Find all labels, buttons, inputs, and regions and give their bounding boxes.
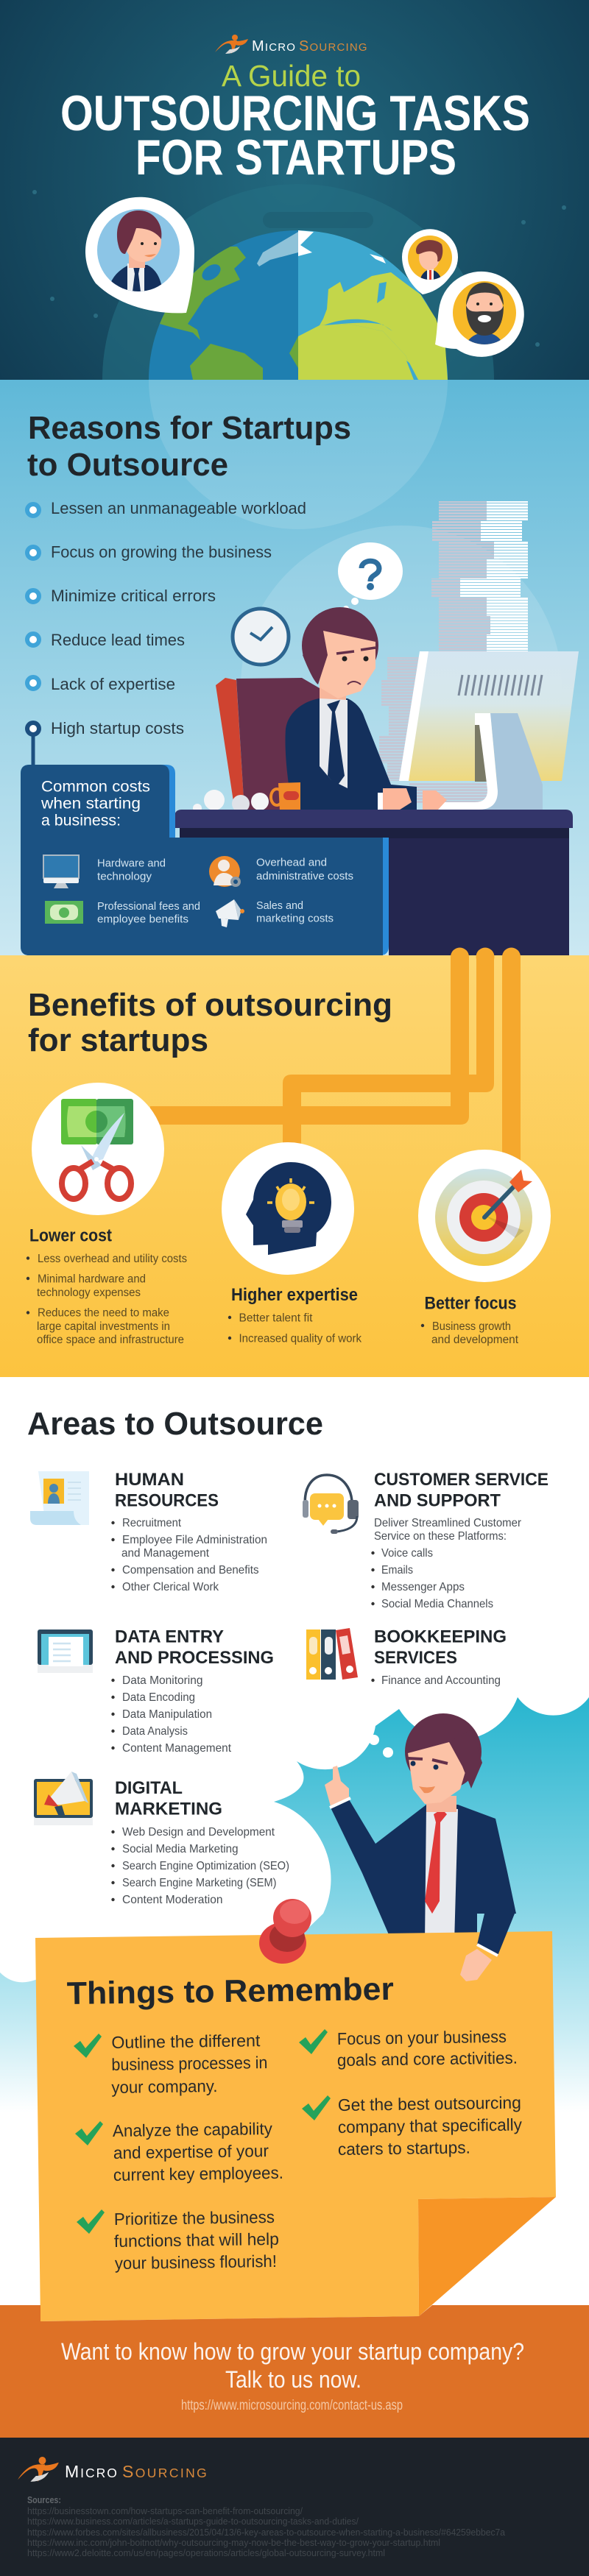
icon: crumpled paper	[193, 790, 269, 813]
panel: things to remember	[35, 1899, 556, 2321]
panel: benefits of outsourcing	[0, 948, 589, 1377]
heading: common costs: a business:	[41, 813, 121, 829]
icon: mug	[271, 782, 300, 811]
text: data entry: DATA ENTRY	[115, 1627, 224, 1647]
list: reasons: Lack of expertise	[51, 675, 175, 693]
illustration: desk	[174, 810, 573, 955]
text: call to action: https://www.microsourcing.com/contact-us.asp	[181, 2398, 403, 2413]
checklist: right column: caters to startups.	[338, 2137, 470, 2159]
text: data entry: Data Encoding	[122, 1691, 195, 1704]
heading: common costs: Common costs	[41, 779, 150, 795]
checklist: right column	[299, 2027, 523, 2159]
checklist: left column: your company.	[111, 2076, 218, 2097]
panel: header	[0, 0, 589, 380]
text: customer service: AND SUPPORT	[374, 1491, 501, 1510]
panel: call to action	[0, 2305, 589, 2438]
text: lower cost	[27, 1226, 187, 1346]
text: customer service: Social Media Channels	[381, 1598, 493, 1610]
list: reasons: Lessen an unmanageable workload	[51, 499, 306, 517]
title: FOR STARTUPS	[135, 130, 456, 185]
heading: benefits: Benefits of outsourcing	[28, 987, 392, 1023]
text: lower cost: Less overhead and utility costs	[38, 1253, 187, 1265]
text: lower cost: office space and infrastructure	[37, 1334, 184, 1346]
logo: MicroSourcing footer: SOURCING	[122, 2462, 208, 2481]
text: bookkeeping: Finance and Accounting	[381, 1674, 501, 1687]
text: call to action	[61, 2338, 524, 2413]
text: higher expertise	[228, 1285, 361, 1345]
text: hardware: Hardware and	[97, 857, 166, 870]
icon: person with gear	[209, 856, 241, 887]
text: better focus: Business growth	[432, 1320, 511, 1333]
heading: common costs	[40, 779, 150, 829]
checklist: left column: your business flourish!	[115, 2251, 277, 2273]
text: digital marketing	[111, 1778, 289, 1906]
text: human resources: Employee File Administration	[122, 1534, 267, 1546]
checklist: left column: functions that will help	[114, 2229, 279, 2251]
checklist: left column: current key employees.	[113, 2163, 283, 2184]
text: customer service: Messenger Apps	[381, 1581, 465, 1593]
text: digital marketing: Web Design and Development	[122, 1826, 275, 1839]
text: overhead: Overhead and	[256, 857, 327, 868]
panel: common costs	[21, 765, 389, 955]
text: sources: https://www.inc.com/john-boitnott/why-outsourcing-may-now-be-the-best-way-to-grow-your-startup.html	[27, 2537, 440, 2548]
text: customer service: Emails	[381, 1564, 413, 1577]
logo: MicroSourcing	[215, 35, 368, 54]
title: A Guide to	[222, 59, 361, 93]
text: digital marketing: MARKETING	[115, 1799, 222, 1819]
text: human resources: Recruitment	[122, 1517, 182, 1529]
panel: areas to outsource	[0, 1377, 589, 2321]
heading: reasons: Reasons for Startups	[28, 410, 351, 446]
cloud background	[0, 1697, 589, 2112]
icon: paper stacks	[379, 501, 528, 781]
logo: MicroSourcing footer	[18, 2457, 208, 2482]
text: customer service: CUSTOMER SERVICE	[374, 1470, 549, 1490]
text: digital marketing: Social Media Marketing	[122, 1843, 239, 1855]
checklist: right column: goals and core activities.	[337, 2048, 518, 2070]
icon: large pin with businessman	[85, 197, 194, 313]
text: digital marketing: Search Engine Marketing (SEM)	[122, 1877, 277, 1889]
text: professional fees: Professional fees and	[97, 900, 200, 913]
text: digital marketing: Search Engine Optimization (SEO)	[122, 1860, 289, 1872]
icon: head with light bulb	[222, 1142, 354, 1275]
logo: MicroSourcing: SOURCING	[299, 38, 368, 54]
text: higher expertise: Increased quality of work	[239, 1332, 361, 1345]
text: sales and marketing	[256, 899, 334, 924]
illustration: pointing businessman	[325, 1713, 516, 1943]
text: customer service: Deliver Streamlined Customer	[374, 1517, 522, 1529]
icon: pin with bearded man	[435, 272, 524, 357]
text: data entry: Data Manipulation	[122, 1708, 212, 1721]
checklist: right column: company that specifically	[338, 2115, 523, 2137]
text: better focus: Better focus	[424, 1294, 517, 1313]
panel: footer	[0, 2438, 589, 2576]
checklist: left column: Analyze the capability	[113, 2119, 273, 2140]
checklist: right column: Focus on your business	[337, 2027, 507, 2048]
text: sales and marketing: Sales and	[256, 899, 303, 912]
text: customer service	[371, 1470, 549, 1610]
heading: areas: Areas to Outsource	[27, 1406, 323, 1442]
text: call to action: Talk to us now.	[225, 2366, 361, 2393]
text: hardware: technology	[97, 870, 152, 883]
icon: resume document	[30, 1471, 89, 1525]
heading: common costs: when starting	[40, 795, 141, 813]
icon: clock	[233, 609, 289, 665]
text: sources: Sources:	[27, 2494, 61, 2505]
text: sources: https://businesstown.com/how-startups-can-benefit-from-outsourcing/	[27, 2505, 303, 2516]
checklist: left column: and expertise of your	[113, 2141, 269, 2162]
icon: data entry screen	[38, 1630, 93, 1673]
icon: small pin with smiling man	[402, 229, 458, 294]
icon: chair	[216, 678, 320, 811]
text: lower cost: Lower cost	[29, 1226, 112, 1245]
illustration: worried businessman	[285, 607, 447, 811]
text: sources: https://www.forbes.com/sites/allbusiness/2015/04/13/6-key-areas-to-outsource-when-starting-a-business/#64259ebbec7a	[27, 2527, 506, 2538]
icon: binders	[306, 1628, 358, 1680]
text: lower cost: Minimal hardware and	[38, 1273, 146, 1285]
text: data entry: AND PROCESSING	[115, 1648, 274, 1668]
text: human resources: Compensation and Benefits	[122, 1564, 259, 1577]
text: bookkeeping: BOOKKEEPING	[374, 1627, 507, 1647]
panel: reasons for startups	[0, 380, 589, 955]
checklist: left column: Prioritize the business	[114, 2207, 275, 2229]
icon: computer monitor	[399, 651, 579, 810]
heading: benefits	[28, 987, 392, 1058]
text: professional fees	[97, 900, 200, 926]
list: reasons: Minimize critical errors	[51, 587, 216, 605]
text: higher expertise: Higher expertise	[231, 1285, 358, 1305]
list: reasons	[27, 499, 306, 767]
icon: push pin	[259, 1899, 311, 1964]
logo: MicroSourcing: MICRO	[252, 38, 296, 54]
text: higher expertise: Better talent fit	[239, 1312, 313, 1325]
list: reasons: Reduce lead times	[51, 631, 185, 649]
text: better focus	[421, 1294, 519, 1346]
title	[60, 59, 530, 185]
checklist: left column: Outline the different	[111, 2031, 261, 2052]
text: human resources: HUMAN	[115, 1470, 184, 1490]
text: human resources	[111, 1470, 267, 1593]
checklist: right column: Get the best outsourcing	[338, 2093, 521, 2115]
text: human resources: and Management	[121, 1547, 210, 1560]
list: reasons: High startup costs	[51, 719, 184, 737]
text: lower cost: Reduces the need to make	[38, 1307, 169, 1319]
text: data entry: Content Management	[122, 1742, 232, 1755]
text: hardware	[97, 857, 166, 883]
icon: megaphone	[216, 899, 244, 927]
text: sources	[27, 2494, 506, 2558]
icon: question bubble	[338, 542, 403, 612]
text: sources: https://www2.deloitte.com/us/en/pages/operations/articles/global-outsourcing-survey.html	[27, 2547, 385, 2558]
heading: things to remember: Things to Remember	[66, 1972, 394, 2011]
text: data entry	[111, 1627, 274, 1755]
icon: cash	[45, 901, 83, 924]
checklist: left column: business processes in	[111, 2053, 268, 2074]
text: human resources: RESOURCES	[115, 1491, 219, 1510]
text: overhead: administrative costs	[256, 870, 353, 882]
text: overhead	[256, 857, 353, 882]
text: customer service: Voice calls	[381, 1547, 433, 1560]
logo: MicroSourcing footer: MICRO	[65, 2462, 119, 2481]
icon: target with arrow	[418, 1150, 551, 1282]
text: bookkeeping: SERVICES	[374, 1648, 457, 1668]
text: digital marketing: Content Moderation	[122, 1894, 222, 1906]
heading: reasons: to Outsource	[27, 447, 228, 483]
text: data entry: Data Analysis	[122, 1725, 188, 1738]
globe	[149, 230, 448, 380]
checklist: left column	[74, 2031, 283, 2273]
text: customer service: Service on these Platforms:	[374, 1530, 507, 1543]
text: sources: https://www.business.com/articles/a-startups-guide-to-outsourcing-tasks-and-duties/	[27, 2516, 359, 2527]
icon: scissors cutting cash	[32, 1083, 164, 1215]
text: call to action: Want to know how to grow your startup company?	[61, 2338, 524, 2365]
heading: benefits: for startups	[28, 1022, 208, 1058]
text: human resources: Other Clerical Work	[122, 1581, 219, 1593]
list: reasons: Focus on growing the business	[51, 543, 272, 561]
heading: reasons	[27, 410, 351, 483]
icon: megaphone on screen	[34, 1772, 93, 1825]
text: digital marketing: DIGITAL	[115, 1778, 183, 1798]
text: bookkeeping	[371, 1627, 507, 1687]
text: professional fees: employee benefits	[97, 913, 188, 926]
text: lower cost: technology expenses	[37, 1287, 141, 1299]
text: data entry: Data Monitoring	[122, 1674, 203, 1687]
text: better focus: and development	[431, 1334, 519, 1346]
icon: headset with chat bubble	[303, 1475, 359, 1534]
text: sales and marketing: marketing costs	[256, 913, 334, 924]
text: lower cost: large capital investments in	[37, 1320, 170, 1333]
illustration: businessman right arm	[460, 1914, 515, 1981]
icon: monitor	[43, 855, 79, 888]
connector pipes	[150, 948, 521, 1163]
